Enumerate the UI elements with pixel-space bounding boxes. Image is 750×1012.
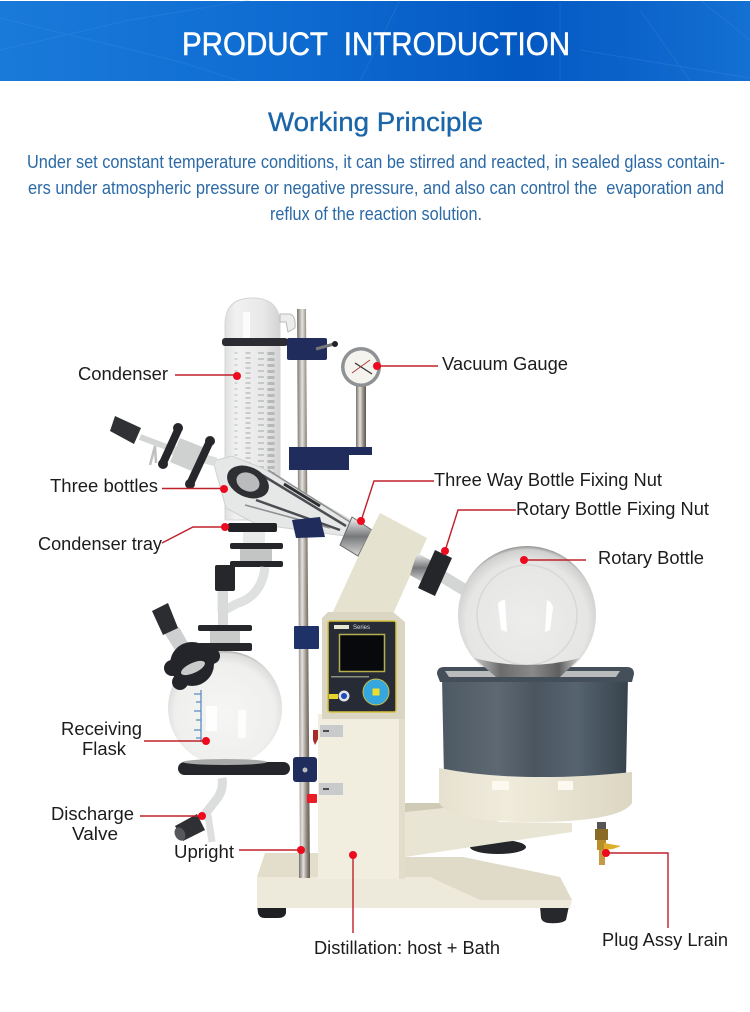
receiving flask: [168, 625, 282, 765]
callout: condenser: [78, 364, 241, 384]
callout: distillation host and bath: Distillation: host + Bath: [314, 938, 500, 958]
vacuum gauge: [289, 347, 381, 470]
header banner: [0, 0, 750, 81]
callout: upright: [174, 842, 305, 862]
warning labels: [307, 725, 343, 803]
callout: rotary bottle: Rotary Bottle: [598, 548, 704, 568]
base plate: [257, 853, 572, 923]
blue clamp: condenser: [287, 338, 338, 360]
metal collar: [340, 517, 372, 556]
intro paragraph: [27, 151, 725, 224]
rod clamp: [294, 626, 319, 649]
callout: receiving flask: [61, 719, 210, 759]
title: PRODUCT INTRODUCTION: [182, 26, 570, 62]
heading: working principle: Working Principle: [268, 107, 483, 137]
callout: condenser tray: [38, 523, 229, 554]
callout: rotary bottle fixing nut: [441, 499, 709, 555]
main body: [307, 513, 427, 879]
intro paragraph: reflux of the reaction solution.: [270, 203, 482, 224]
water bath: [437, 658, 634, 822]
support rod: [297, 309, 310, 880]
control panel: [322, 612, 405, 719]
callout: condenser tray: Condenser tray: [38, 534, 162, 554]
callout: rotary bottle: [520, 548, 704, 568]
connecting tube: [215, 565, 265, 626]
callout: discharge valve: Discharge: [51, 804, 134, 824]
callout: plug assy lrain: Plug Assy Lrain: [602, 930, 728, 950]
callout: upright: Upright: [174, 842, 234, 862]
condenser tray: [228, 523, 283, 567]
condenser: [222, 298, 295, 520]
callout: rotary bottle fixing nut: Rotary Bottle Fixing Nut: [516, 499, 709, 519]
callout: three bottles: Three bottles: [50, 476, 158, 496]
callout: three bottles: [50, 476, 228, 496]
bath support arm: [405, 803, 572, 857]
callout: three way bottle fixing nut: Three Way Bottle Fixing Nut: [434, 470, 662, 490]
callout: distillation host and bath: [314, 851, 500, 958]
callout: plug assy lrain: [602, 849, 728, 950]
callout: vacuum gauge: Vacuum Gauge: [442, 354, 568, 374]
callout: receiving flask: Receiving: [61, 719, 142, 739]
receiving flask side neck: [152, 603, 220, 690]
callout: three way bottle fixing nut: [357, 470, 662, 525]
brass drain plug: [595, 822, 621, 865]
callout: receiving flask: Flask: [82, 739, 127, 759]
rotary evaporator machine: [110, 298, 634, 923]
gauge bracket: [289, 447, 372, 470]
rotary bottle fixing nut: [410, 550, 468, 596]
flask ring and clamp: [178, 757, 317, 782]
callout: discharge valve: Valve: [72, 824, 118, 844]
control panel: Series: [353, 625, 370, 631]
callout: discharge valve: [51, 804, 206, 844]
callout: condenser: Condenser: [78, 364, 168, 384]
rotary bottle: [458, 546, 596, 684]
discharge valve: [172, 778, 222, 843]
three-way glass: [213, 456, 372, 556]
callout: vacuum gauge: [373, 354, 568, 374]
upper left stopcock: [110, 416, 216, 489]
